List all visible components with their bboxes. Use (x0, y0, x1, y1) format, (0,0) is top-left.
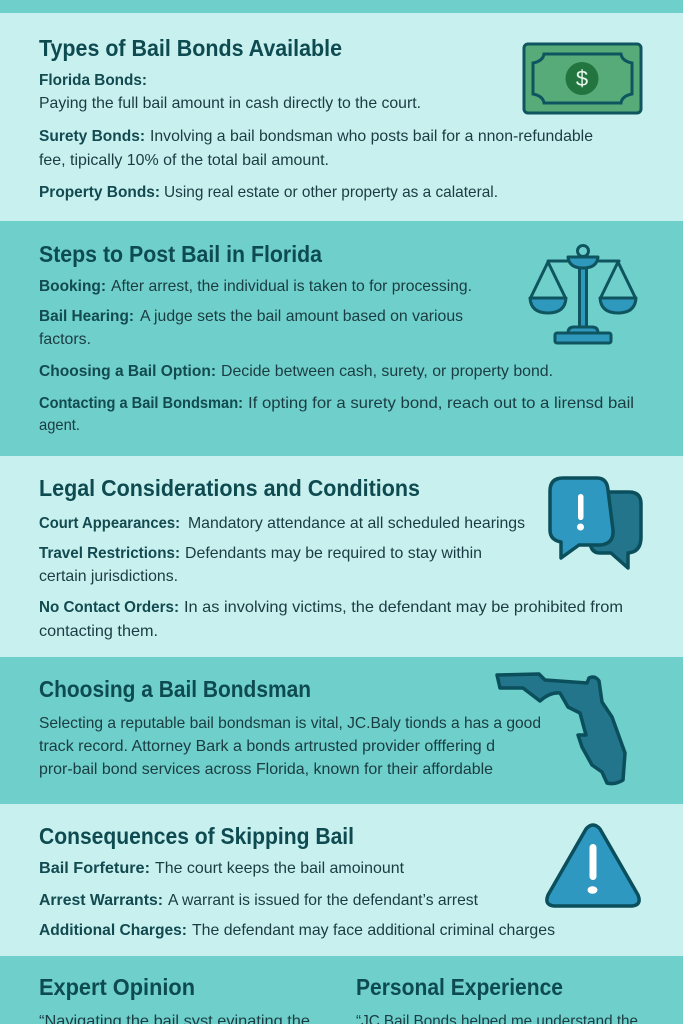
icon: speech bubbles (550, 478, 641, 568)
text: bondsman paragraph: Selecting a reputable bail bondsman is vital, JC.Baly tionds a has a good (39, 715, 541, 732)
text: contacting a bail bondsman: Contacting a Bail Bondsman: (39, 395, 243, 412)
text: bondsman paragraph: track record. Attorney Bark a bonds artrusted provider offfering d (39, 738, 495, 755)
text: bondsman paragraph: pror-bail bond services across Florida, known for their affordable (39, 761, 493, 778)
heading: steps to post bail: Steps to Post Bail in Florida (39, 241, 322, 267)
panel: opinion and experience (0, 956, 683, 1024)
text: florida bonds: Paying the full bail amount in cash directly to the court. (39, 95, 421, 112)
text: bail forfeiture (39, 860, 405, 877)
text: choosing a bail option (39, 363, 553, 380)
heading: personal experience: Personal Experience (356, 974, 563, 1000)
panel: steps to post bail (0, 221, 683, 456)
icon: warning triangle (547, 825, 639, 906)
text: choosing a bail option: Choosing a Bail Option: (39, 363, 216, 380)
text: contacting a bail bondsman (39, 395, 634, 434)
text: arrest warrants (39, 892, 479, 909)
panel: choosing a bail bondsman (0, 657, 683, 804)
text: booking: After arrest, the individual is taken to for processing. (111, 278, 472, 295)
text: additional charges: Additional Charges: (39, 922, 187, 939)
text: bail hearing: A judge sets the bail amount based on various (140, 308, 463, 325)
text: bail hearing: factors. (39, 331, 91, 348)
text: bail forfeiture: Bail Forfeture: (39, 860, 150, 877)
panel: consequences of skipping bail (0, 804, 683, 956)
text: no contact orders: No Contact Orders: (39, 599, 179, 616)
text: court appearances: Court Appearances: (39, 515, 180, 532)
heading: choosing a bail bondsman: Choosing a Bail Bondsman (39, 676, 311, 702)
icon: dollar bill (524, 44, 641, 113)
text: arrest warrants: Arrest Warrants: (39, 892, 163, 909)
text: arrest warrants: A warrant is issued for the defendant’s arrest (168, 892, 479, 909)
text: bail hearing: Bail Hearing: (39, 308, 134, 325)
text: choosing a bail option: Decide between cash, surety, or property bond. (221, 363, 553, 380)
heading: legal considerations: Legal Considerations and Conditions (39, 475, 420, 501)
text: no contact orders: contacting them. (39, 623, 158, 640)
text: florida bonds: Florida Bonds: (39, 72, 147, 89)
panel: legal considerations (0, 456, 683, 657)
text: property bonds: Property Bonds: (39, 184, 160, 201)
text: bondsman paragraph (39, 715, 541, 778)
icon: scales of justice (530, 246, 636, 343)
text: court appearances (39, 515, 525, 532)
text: additional charges: The defendant may face additional criminal charges (192, 922, 555, 939)
text: bail hearing (39, 308, 463, 348)
text: no contact orders (39, 599, 623, 640)
text: court appearances: Mandatory attendance at all scheduled hearings (188, 515, 525, 532)
heading: expert opinion: Expert Opinion (39, 974, 195, 1000)
text: travel restrictions (39, 545, 482, 585)
text: surety bonds (39, 128, 593, 169)
text: property bonds: Using real estate or other property as a calateral. (164, 184, 498, 201)
text: contacting a bail bondsman: agent. (39, 417, 80, 434)
text: florida bonds (39, 72, 421, 112)
text: surety bonds: fee, tipically 10% of the total bail amount. (39, 152, 329, 169)
text: travel restrictions: Travel Restrictions: (39, 545, 180, 562)
text: no contact orders: In as involving victims, the defendant may be prohibited from (184, 599, 623, 616)
text: surety bonds: Involving a bail bondsman who posts bail for a nnon-refundable (150, 128, 593, 145)
text: additional charges (39, 922, 555, 939)
text: surety bonds: Surety Bonds: (39, 128, 145, 145)
text: contacting a bail bondsman: If opting for a surety bond, reach out to a lirensd bail (248, 395, 634, 412)
text: bail forfeiture: The court keeps the bail amoinount (155, 860, 405, 877)
text: booking: Booking: (39, 278, 106, 295)
heading: consequences: Consequences of Skipping Bail (39, 823, 354, 849)
panel: types of bail bonds (0, 13, 683, 221)
text: travel restrictions: certain jurisdictions. (39, 568, 178, 585)
top band (0, 0, 683, 13)
heading: types of bail bonds: Types of Bail Bonds Available (39, 35, 342, 61)
icon: dollar bill: $ (576, 66, 588, 91)
text: travel restrictions: Defendants may be required to stay within (185, 545, 482, 562)
icon: florida map (497, 674, 625, 784)
